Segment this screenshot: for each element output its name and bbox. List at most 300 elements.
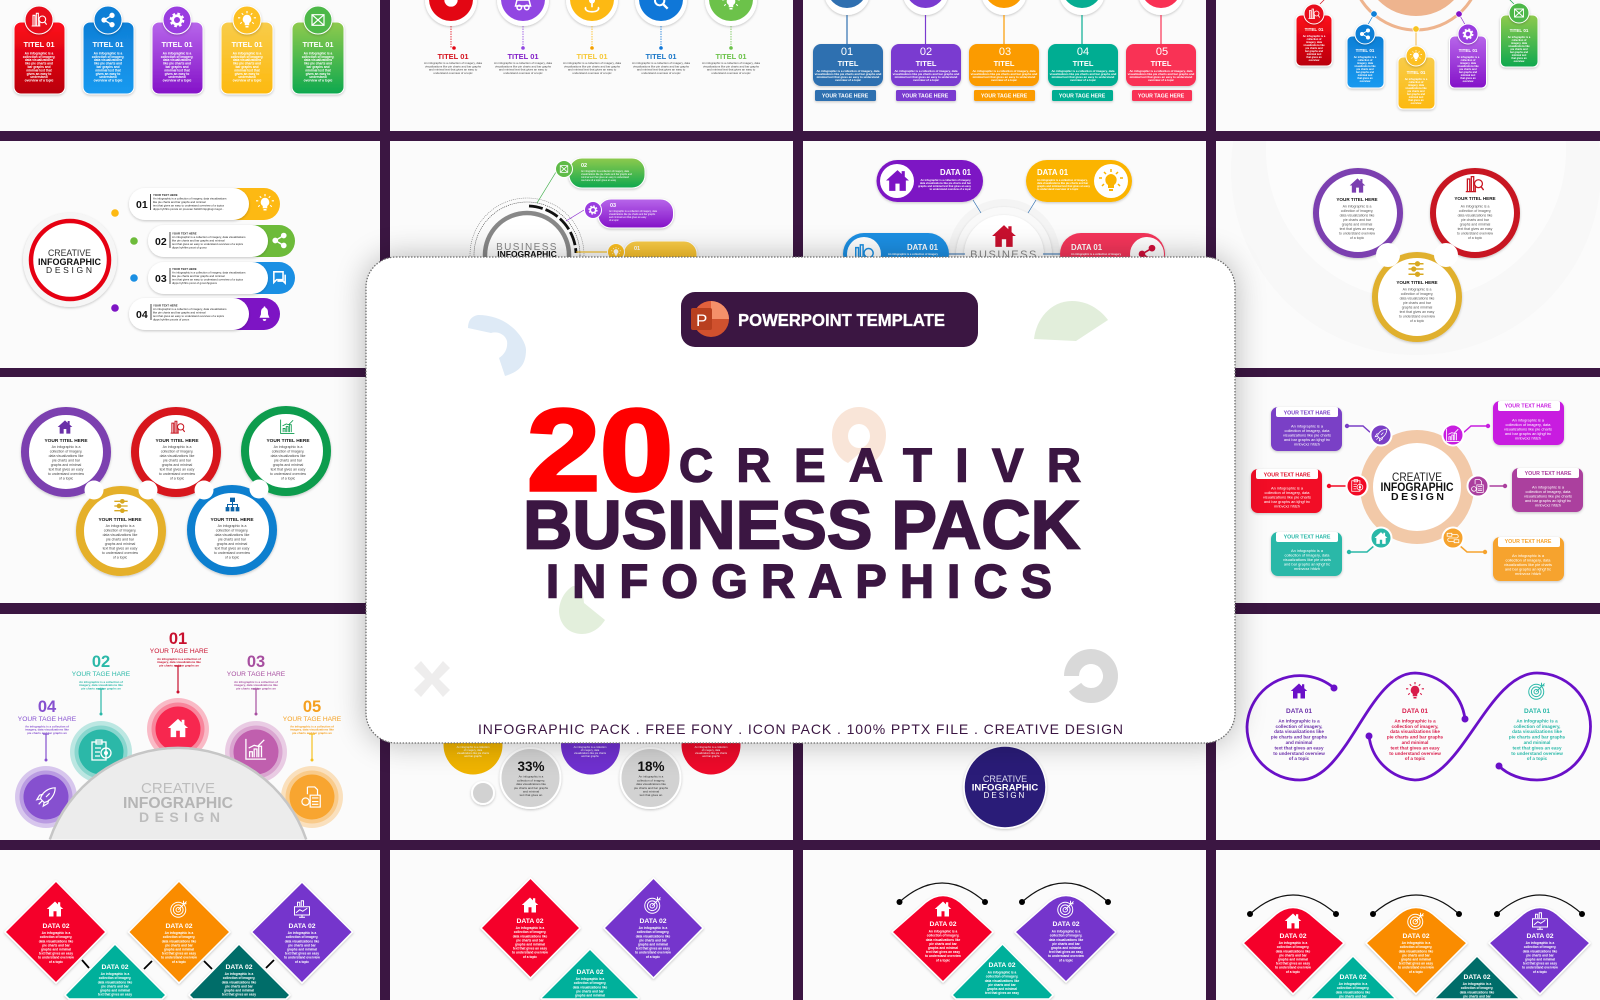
panel: radial hanging cards: imagery, data [1306, 41, 1323, 44]
panel: radial hanging cards: imagery, data [1460, 62, 1477, 65]
panel: five tall gradient cards: like pie charts and [163, 62, 191, 66]
panel: S-curve wave with three data blocks: text that gives an easy [1390, 745, 1440, 750]
panel: radial six cards around creative ring: YOUR TEXT HARE [1284, 534, 1331, 540]
panel: percentage drops: and minimal [523, 790, 539, 794]
panel: five linked coloured rings: data visualizations like [160, 454, 194, 458]
panel: semicircle with five numbered bubbles: An infographic is a collection of [290, 724, 334, 728]
decorative shape: blue arc [468, 315, 526, 376]
panel: five circle pins with dashed stems: and minimal text that gives an easy to [568, 68, 617, 72]
panel: semicircle with five numbered bubbles [15, 630, 343, 840]
panel: numbered title boxes with tags: visualizations like pie charts and bar graphs and [815, 72, 882, 76]
panel: radial hanging cards: pie charts and [1306, 47, 1323, 50]
decorative shape: grey cross [414, 661, 450, 697]
panel: navy creative circle: DESIGN [984, 791, 1026, 800]
panel: five linked coloured rings: pie charts and bar [218, 538, 247, 542]
panel: three diamonds: collection of imagery, [514, 930, 546, 934]
panel: rounded diamonds with arcs, two up: An infographic is a [988, 971, 1017, 975]
panel: rounded diamonds with arcs, two up: text that gives an easy [1049, 950, 1083, 954]
panel: radial six cards around creative ring: visualizations like pie charts [1263, 494, 1311, 500]
panel: radial six cards around creative ring: mnbvcxz hfdzh [1515, 436, 1541, 440]
panel: red ring with four pill rows: CREATIVE [48, 248, 91, 259]
panel: radial hanging cards: bar graphs and [1305, 50, 1324, 53]
panel: radial six cards around creative ring: and bar graphs an kjhgf trc [1505, 431, 1551, 436]
panel: red ring with four pill rows: 01 [136, 199, 148, 211]
panel: radial hanging cards: minimal text [1409, 96, 1423, 99]
panel: numbered title boxes with tags: 05 [1156, 46, 1168, 58]
panel: three linked ring blobs: to understand overview [1457, 232, 1494, 236]
panel: five linked coloured rings: text that gives an easy [49, 468, 84, 472]
panel: three linked ring blobs: YOUR TITEL HERE [1454, 196, 1496, 201]
panel: radial hanging cards: An infographic is a [1405, 78, 1428, 81]
panel: rounded diamonds with arcs, three up: An infographic is a [1526, 941, 1555, 945]
panel: concentric gauge with callout pills: minimal text that gives an easy to understand [581, 176, 630, 179]
panel: five tall gradient cards: bar graphs and [165, 65, 189, 69]
panel: rounded diamonds with arcs, three up: DATA 02 [1526, 933, 1554, 940]
panel: five circle pins with dashed stems: visualizations like pie charts and bar graphs [495, 64, 552, 68]
panel: radial six cards around creative ring: INFOGRAPHIC [1380, 482, 1454, 494]
panel: five linked coloured rings: YOUR TITEL HERE [98, 517, 142, 523]
panel: three diamonds: to understand overview [635, 951, 671, 955]
panel: five diamonds: of a topic [49, 960, 63, 964]
panel: four data pills around business hub: An infographic is a collection of imagery [1071, 252, 1122, 256]
panel: radial hanging cards: pie charts and [1408, 90, 1425, 93]
panel: radial six cards around creative ring [1251, 401, 1583, 581]
panel: rounded diamonds with arcs, two up: pie charts and bar [988, 983, 1016, 987]
panel: five tall gradient cards: An infographic is a [94, 51, 123, 55]
panel: three diamonds: collection of imagery, [574, 981, 606, 985]
panel: five tall gradient cards: gives an easy to [235, 72, 259, 76]
panel: numbered title boxes with tags: TITEL [1151, 59, 1172, 68]
panel: numbered title boxes with tags: TITEL [916, 59, 937, 68]
panel: numbered title boxes with tags: minimal text that gives an easy to understand [1052, 75, 1115, 79]
panel: five diamonds: text that gives an easy [98, 993, 132, 997]
panel: radial six cards around creative ring: An infographic is a [1291, 424, 1324, 428]
panel: five diamonds: text that gives an easy [285, 952, 319, 956]
panel: rounded diamonds with arcs, three up: text that gives an easy [1523, 962, 1557, 966]
panel: five tall gradient cards: collection of imagery, [92, 55, 124, 59]
panel: three diamonds: of a topic [646, 955, 660, 959]
panel: three linked ring blobs: pie charts and bar [1403, 301, 1432, 305]
panel: five diamonds: graphs and minimal [41, 948, 71, 952]
panel: three diamonds: graphs and minimal [575, 994, 605, 998]
panel: rounded diamonds with arcs, three up: DATA 02 [1463, 974, 1491, 981]
panel: rounded diamonds with arcs, two up: DATA 02 [988, 962, 1016, 969]
panel: numbered title boxes with tags: visualizations like pie charts and bar graphs and [971, 72, 1038, 76]
panel: three linked ring blobs: of a topic [1350, 236, 1364, 240]
panel: five tall gradient cards: TITEL 01 [23, 40, 55, 49]
panel: five circle pins with dashed stems: TITEL 01 [507, 52, 539, 61]
panel: radial six cards around creative ring: An infographic is a [1271, 486, 1304, 490]
panel: S-curve wave with three data blocks: to understand overview [1273, 751, 1325, 756]
panel: radial six cards around creative ring: mnbvcxz hfdzh [1274, 504, 1300, 508]
panel: rounded diamonds with arcs, three up: collection of imagery, [1524, 945, 1556, 949]
panel: five circle pins with dashed stems: understand overview of a topic [433, 71, 473, 75]
panel: rounded diamonds with arcs, two up: data visualizations like [1049, 938, 1083, 942]
panel: five tall gradient cards: overview of a topic [25, 79, 54, 83]
panel: five linked coloured rings: pie charts and bar [106, 538, 135, 542]
panel: semicircle with five numbered bubbles: YOUR TAGE HARE [150, 648, 209, 655]
panel: navy creative circle: CREATIVE [983, 774, 1027, 784]
panel: rounded diamonds with arcs, two up: graphs and minimal [1051, 946, 1081, 950]
panel: five linked coloured rings: graphs and minimal [51, 463, 81, 467]
panel: five tall gradient cards: understand [309, 75, 327, 79]
panel: radial six cards around creative ring: and bar graphs an kjhgf trc [1284, 562, 1330, 566]
panel: rounded diamonds with arcs, three up: pie charts and bar [1339, 994, 1367, 998]
panel: red ring with four pill rows: like pie charts and bar graphs and minimal [153, 310, 206, 314]
panel: five tall gradient cards: understand [99, 75, 117, 79]
panel: five diamonds: to understand overview [284, 956, 320, 960]
panel: rounded diamonds with arcs, three up: DATA 02 [1402, 933, 1430, 940]
panel: three linked ring blobs: data visualizations like [1340, 214, 1374, 218]
panel: five circle pins with dashed stems: TITEL 01 [576, 52, 608, 61]
panel: red ring with four pill rows: dipps hyhhhs pxxxts sir proonan hshkhh lkpgbxgn ksgd... [153, 207, 224, 211]
panel: three linked ring blobs: pie charts and bar [1343, 218, 1372, 222]
panel: numbered title boxes with tags: minimal text that gives an easy to understand [973, 75, 1036, 79]
panel: five tall gradient cards: TITEL 01 [231, 40, 263, 49]
panel: red ring with four pill rows: An infographic is a collection of imagery, data visualizations [172, 270, 246, 274]
panel: radial six cards around creative ring: and bar graphs an kjhgf trc [1525, 498, 1571, 503]
panel: three diamonds: graphs and minimal [515, 942, 545, 946]
panel: five diamonds: DATA 02 [165, 923, 193, 930]
panel: radial hanging cards: visualizations like [1405, 87, 1427, 90]
panel: rounded diamonds with arcs, three up: An infographic is a [1402, 941, 1431, 945]
panel: radial hanging cards: that gives an [1357, 77, 1373, 80]
panel: three linked ring blobs: graphs and minimal [1342, 222, 1372, 226]
panel: five linked coloured rings: text that gives an easy [215, 546, 250, 550]
panel: radial hanging cards: overview [1309, 59, 1319, 62]
panel: five linked coloured rings: to understand overview [102, 551, 139, 555]
panel: percentage drops: data visualizations like [516, 782, 546, 786]
panel: three diamonds: collection of imagery, [637, 930, 669, 934]
panel: rounded diamonds with arcs, two up: of a topic [1059, 958, 1073, 962]
panel: five diamonds: An infographic is a [288, 931, 317, 935]
panel: rounded diamonds with arcs, three up [1243, 895, 1590, 999]
panel: radial six cards around creative ring: mnbvcxz hfdzh [1294, 442, 1320, 446]
panel: semicircle with five numbered bubbles: pie charts and bar graphs an [236, 686, 276, 690]
panel: rounded diamonds with arcs, three up: data visualizations like [1523, 949, 1557, 953]
panel: semicircle with five numbered bubbles: imagery, data visualizations like [290, 728, 334, 732]
panel: five tall gradient cards: understand [168, 75, 186, 79]
panel: three linked ring blobs: collection of imagery, [1459, 209, 1491, 213]
panel: radial hanging cards: imagery, data [1357, 62, 1374, 65]
panel: five linked coloured rings: of a topic [59, 476, 73, 480]
panel: five circle pins with dashed stems: visualizations like pie charts and bar graphs [425, 64, 482, 68]
panel: radial six cards around creative ring: mnbvcxz hfdzh [1515, 571, 1541, 576]
panel: five linked coloured rings: of a topic [225, 556, 239, 560]
panel: four data pills around business hub: DATA 01 [940, 168, 972, 177]
panel: radial hanging cards: imagery, data [1408, 84, 1425, 87]
panel: radial hanging cards: visualizations like [1457, 65, 1479, 68]
panel: rounded diamonds with arcs, three up: DATA 02 [1339, 974, 1367, 981]
panel: semicircle with five numbered bubbles: imagery, data visualizations like [157, 660, 201, 664]
panel: radial hanging cards: An infographic is a [1457, 56, 1480, 59]
panel: concentric gauge with callout pills: of a topic [609, 219, 620, 222]
panel: percentage drops: data visualizations like [636, 782, 666, 786]
panel: radial hanging cards: minimal text [1512, 54, 1526, 57]
panel: five circle pins with dashed stems: and minimal text that gives an easy to [637, 68, 686, 72]
panel: radial hanging cards: An infographic is a [1303, 35, 1326, 38]
panel: five linked coloured rings: YOUR TITEL HERE [266, 438, 310, 444]
panel: percentage drops: of imagery, data [464, 748, 483, 752]
panel: three diamonds: text that gives an easy [636, 947, 670, 951]
panel: radial six cards around creative ring: collection of imagery, data [1265, 490, 1310, 495]
panel: semicircle with five numbered bubbles: pie charts and bar graphs an [292, 731, 332, 735]
panel: radial six cards around creative ring: YOUR TEXT HARE [1505, 404, 1552, 410]
panel: five tall gradient cards: collection of imagery, [231, 55, 263, 59]
panel: five linked coloured rings: collection of imagery, [50, 450, 82, 454]
panel: S-curve wave with three data blocks: data visualizations like [1390, 729, 1440, 734]
panel: radial hanging cards: minimal text [1358, 74, 1372, 77]
panel: five tall gradient cards: bar graphs and [235, 65, 259, 69]
panel: radial hanging cards: visualizations like [1303, 44, 1325, 47]
heading: business pack: BUSINESS PACK [523, 486, 1080, 564]
panel: radial six cards around creative ring: visualizations like pie charts [1524, 494, 1572, 498]
panel: radial hanging cards: collection of [1358, 59, 1373, 62]
panel: three diamonds: data visualizations like [513, 934, 547, 938]
panel: percentage drops: and bar graphs [464, 754, 482, 758]
panel: radial hanging cards: overview [1411, 102, 1421, 105]
panel: five tall gradient cards: understand [238, 75, 256, 79]
panel: percentage drops: 18% [637, 759, 665, 774]
panel: five linked coloured rings: to understand overview [159, 472, 196, 476]
panel: three linked ring blobs: of a topic [1468, 236, 1482, 240]
panel: three linked ring blobs: An infographic is a [1403, 288, 1431, 292]
panel: five diamonds: text that gives an easy [222, 993, 256, 997]
panel: S-curve wave with three data blocks: to understand overview [1511, 751, 1563, 756]
panel: radial hanging cards: An infographic is a [1508, 36, 1531, 39]
panel: radial hanging cards: bar graphs and [1356, 71, 1375, 74]
panel: rounded diamonds with arcs, two up: An infographic is a [929, 930, 958, 934]
panel: rounded diamonds with arcs, three up: data visualizations like [1276, 949, 1310, 953]
panel: five diamonds: DATA 02 [225, 964, 253, 971]
panel: five linked coloured rings: An infographic is a [274, 445, 302, 449]
panel: S-curve wave with three data blocks: to understand overview [1389, 751, 1441, 756]
panel: five linked coloured rings: An infographic is a [218, 524, 246, 528]
panel: rounded diamonds with arcs, three up: text that gives an easy [1399, 962, 1433, 966]
panel: semicircle with five numbered bubbles: DESIGN [139, 809, 220, 825]
panel: radial six cards around creative ring: An infographic is a [1512, 418, 1545, 422]
panel: five tall gradient cards: gives an easy to [306, 72, 330, 76]
panel: five linked coloured rings: text that gives an easy [271, 468, 306, 472]
panel: five tall gradient cards: TITEL 01 [92, 40, 124, 49]
panel: radial six cards around creative ring: CREATIVE [1392, 472, 1442, 484]
panel: rounded diamonds with arcs, three up: graphs and minimal [1401, 958, 1431, 962]
panel: five linked coloured rings: text that gives an easy [160, 468, 195, 472]
panel: percentage drops: text that gives an [640, 793, 663, 797]
panel: five tall gradient cards: overview of a topic [163, 79, 192, 83]
panel: percentage drops [444, 716, 740, 808]
panel: S-curve wave with three data blocks: text that gives an easy [1512, 745, 1562, 750]
panel: three linked ring blobs: text that gives an easy [1458, 227, 1493, 231]
panel: five linked coloured rings: text that gives an easy [103, 546, 138, 550]
panel: percentage drops: pie charts and bar graphs [514, 786, 549, 790]
panel: percentage drops: visualizations like pie charts [574, 751, 607, 755]
panel: concentric gauge with callout pills [470, 158, 697, 312]
panel: five tall gradient cards: bar graphs and [306, 65, 330, 69]
panel: radial six cards around creative ring: and bar graphs an kjhgf trc [1505, 566, 1551, 572]
panel: three linked ring blobs: collection of imagery, [1401, 292, 1433, 296]
panel: five diamonds: An infographic is a [101, 972, 130, 976]
panel: radial hanging cards: TITEL 01 [1407, 70, 1426, 75]
panel: numbered title boxes with tags: YOUR TAGE HERE [1059, 94, 1106, 100]
panel: red ring with four pill rows: 03 [155, 273, 167, 285]
panel: S-curve wave with three data blocks: of a topic [1405, 756, 1426, 761]
panel: five tall gradient cards: minimal text that [305, 68, 332, 72]
panel: five diamonds: to understand overview [161, 956, 197, 960]
panel: percentage drops: text that gives an [520, 793, 543, 797]
panel: red ring with four pill rows: like pie charts and bar graphs and minimal [172, 274, 225, 278]
panel: five linked coloured rings: An infographic is a [52, 445, 80, 449]
panel: rounded diamonds with arcs, three up: to understand overview [1522, 966, 1558, 970]
panel: five diamonds: collection of imagery, [286, 935, 318, 939]
panel: three linked ring blobs: data visualizations like [1400, 296, 1434, 300]
panel: concentric gauge with callout pills: 03 [610, 203, 616, 209]
panel: semicircle with five numbered bubbles: YOUR TAGE HARE [283, 716, 342, 723]
panel: radial hanging cards: collection of [1307, 38, 1322, 41]
panel: S-curve wave with three data blocks: data visualizations like [1512, 729, 1562, 734]
panel: radial six cards around creative ring: YOUR TEXT HARE [1284, 410, 1331, 416]
panel: five tall gradient cards: like pie charts and [25, 62, 53, 66]
panel: five tall gradient cards: bar graphs and [96, 65, 120, 69]
panel: semicircle with five numbered bubbles: YOUR TAGE HARE [72, 671, 131, 678]
panel: rounded diamonds with arcs, three up: pie charts and bar [1526, 953, 1554, 957]
panel: radial hanging cards: TITEL 01 [1305, 27, 1324, 32]
panel: red ring with four pill rows: 02 [155, 236, 167, 248]
panel: radial six cards around creative ring: collection of imagery, data [1285, 552, 1330, 558]
panel: radial hanging cards: minimal text [1461, 74, 1475, 77]
number 20: 20 [527, 385, 673, 515]
panel: five diamonds: data visualizations like [285, 939, 319, 943]
panel: five diamonds [5, 881, 352, 999]
panel: radial hanging cards: collection of [1512, 39, 1527, 42]
panel: S-curve wave with three data blocks: An infographic is a [1394, 718, 1436, 723]
panel: numbered title boxes with tags: TITEL [1073, 59, 1094, 68]
panel: numbered title boxes with tags: YOUR TAGE HERE [981, 94, 1028, 100]
panel: percentage drops: of imagery, data [581, 748, 600, 752]
icon: powerpoint logo [691, 301, 729, 337]
panel: three linked ring blobs: YOUR TITEL HERE [1396, 280, 1438, 285]
panel: five circle pins with dashed stems: TITEL 01 [437, 52, 469, 61]
panel: three diamonds: graphs and minimal [638, 942, 668, 946]
panel: semicircle with five numbered bubbles: An infographic is a collection of [79, 680, 123, 684]
panel: semicircle with five numbered bubbles: An infographic is a collection of [25, 724, 69, 728]
panel: semicircle with five numbered bubbles: CREATIVE [141, 780, 215, 797]
panel: five linked coloured rings: collection of imagery, [104, 528, 136, 532]
panel: four data pills around business hub: graphs and minimal text that gives an easy [1037, 184, 1090, 188]
panel: rounded diamonds with arcs, two up: text that gives an easy [985, 991, 1019, 995]
panel: numbered title boxes with tags: visualizations like pie charts and bar graphs and [1050, 72, 1117, 76]
panel: five circle pins with dashed stems: An infographic is a collection of imagery, data [563, 61, 621, 65]
panel: five circle pins with dashed stems: An infographic is a collection of imagery, data [494, 61, 552, 65]
panel: radial hanging cards: overview [1463, 80, 1473, 83]
panel: radial six cards around creative ring: An infographic is a [1512, 553, 1545, 558]
panel: five linked coloured rings: graphs and minimal [273, 463, 303, 467]
panel: percentage drops: visualizations like pie charts [695, 751, 728, 755]
panel: red ring with four pill rows: text that gives an easy to understand overview of a topics [172, 242, 244, 246]
panel: red ring with four pill rows: text that gives an easy to understand overview of a topics [172, 278, 244, 282]
panel: five linked coloured rings: An infographic is a [163, 445, 191, 449]
panel: three linked ring blobs: data visualizations like [1458, 214, 1492, 218]
panel: five linked coloured rings: data visualizations like [49, 454, 83, 458]
panel: red ring with four pill rows: dipps hyhhhs pxxxt of gxxxx [172, 246, 207, 250]
panel: three linked ring blobs: text that gives an easy [1340, 227, 1375, 231]
panel: five linked coloured rings: of a topic [170, 476, 184, 480]
panel: red ring with four pill rows: text that gives an easy to understand overview of a topics [153, 314, 225, 318]
panel: radial six cards around creative ring: mnbvcxz hfdzh [1294, 566, 1320, 571]
panel: red ring with four pill rows: like pie charts and bar graphs and minimal [172, 238, 225, 242]
panel: five tall gradient cards: An infographic is a [233, 51, 262, 55]
panel: radial hanging cards: TITEL 01 [1356, 48, 1375, 53]
panel: radial hanging cards: bar graphs and [1510, 51, 1529, 54]
panel: five diamonds: pie charts and bar [225, 984, 253, 988]
panel: rounded diamonds with arcs, two up: graphs and minimal [987, 987, 1017, 991]
panel: radial six cards around creative ring: visualizations like pie charts [1283, 557, 1331, 562]
panel: numbered title boxes with tags: YOUR TAGE HERE [822, 94, 869, 100]
panel: five tall gradient cards [14, 6, 344, 94]
panel: four data pills around business hub: to understand overview of a topic [1037, 187, 1079, 191]
panel: five circle pins with dashed stems: An infographic is a collection of imagery, data [424, 61, 482, 65]
panel: radial hanging cards: overview [1360, 80, 1370, 83]
panel: percentage drops: collection of imagery, [517, 778, 545, 782]
panel: red ring with four pill rows: dipps hyhhhs pxxxts of pxxxx [153, 318, 190, 322]
panel: rounded diamonds with arcs, two up [892, 883, 1116, 999]
panel: five linked coloured rings: collection of imagery, [161, 450, 193, 454]
panel: S-curve wave with three data blocks: DATA 01 [1286, 708, 1312, 715]
panel: percentage drops: pie charts and bar graphs [634, 786, 669, 790]
panel: five diamonds: text that gives an easy [39, 952, 73, 956]
panel: five circle pins with dashed stems: understand overview of a topic [572, 71, 612, 75]
panel: red ring with four pill rows: YOUR TEXT HERE [172, 267, 197, 271]
panel: three diamonds [481, 878, 703, 999]
panel: five circle pins with dashed stems: visualizations like pie charts and bar graphs [703, 64, 760, 68]
panel: five tall gradient cards: data visualizations [94, 58, 122, 62]
panel: five diamonds: graphs and minimal [287, 948, 317, 952]
panel: three diamonds: pie charts and bar [576, 989, 604, 993]
panel: five tall gradient cards: data visualizations [25, 58, 53, 62]
panel: five diamonds: of a topic [172, 960, 186, 964]
panel: semicircle with five numbered bubbles: 05 [303, 698, 321, 716]
panel: five diamonds: graphs and minimal [100, 988, 130, 992]
panel: radial hanging cards: imagery, data [1511, 42, 1528, 45]
panel: radial hanging cards: visualizations like [1508, 45, 1530, 48]
panel: five tall gradient cards: An infographic is a [304, 51, 333, 55]
panel: five tall gradient cards: TITEL 01 [302, 40, 334, 49]
panel: red ring with four pill rows: An infographic is a collection of imagery, data visualizations [153, 196, 227, 200]
panel: five diamonds: pie charts and bar [288, 943, 316, 947]
panel: numbered title boxes with tags: An infographic is a collection of imagery, data [816, 69, 880, 73]
panel: concentric gauge with callout pills: BUSINESS [496, 242, 558, 253]
panel: three diamonds: An infographic is a [639, 926, 668, 930]
panel: five tall gradient cards: minimal text that [164, 68, 191, 72]
panel: five circle pins with dashed stems: and minimal text that gives an easy to [429, 68, 478, 72]
panel: four data pills around business hub [843, 160, 1165, 311]
panel: five circle pins with dashed stems: understand overview of a topic [711, 71, 751, 75]
panel: rounded diamonds with arcs, two up: pie charts and bar [1052, 942, 1080, 946]
panel: numbered title boxes with tags: 04 [1077, 46, 1089, 58]
panel: radial six cards around creative ring: collection of imagery, data [1506, 422, 1551, 427]
panel: five diamonds: pie charts and bar [101, 984, 129, 988]
panel: radial six cards around creative ring: YOUR TEXT HARE [1505, 539, 1552, 545]
panel: numbered title boxes with tags: visualizations like pie charts and bar graphs and [893, 72, 960, 76]
panel: navy creative circle: INFOGRAPHIC [972, 782, 1038, 794]
panel: S-curve wave with three data blocks: An infographic is a [1278, 718, 1320, 723]
panel: rounded diamonds with arcs, three up: collection of imagery, [1277, 945, 1309, 949]
panel: five tall gradient cards: minimal text that [234, 68, 261, 72]
panel: five tall gradient cards: An infographic is a [25, 51, 54, 55]
panel: five diamonds: graphs and minimal [164, 948, 194, 952]
panel: five tall gradient cards: like pie charts and [233, 62, 261, 66]
icon: powerpoint logo: P [696, 311, 707, 330]
